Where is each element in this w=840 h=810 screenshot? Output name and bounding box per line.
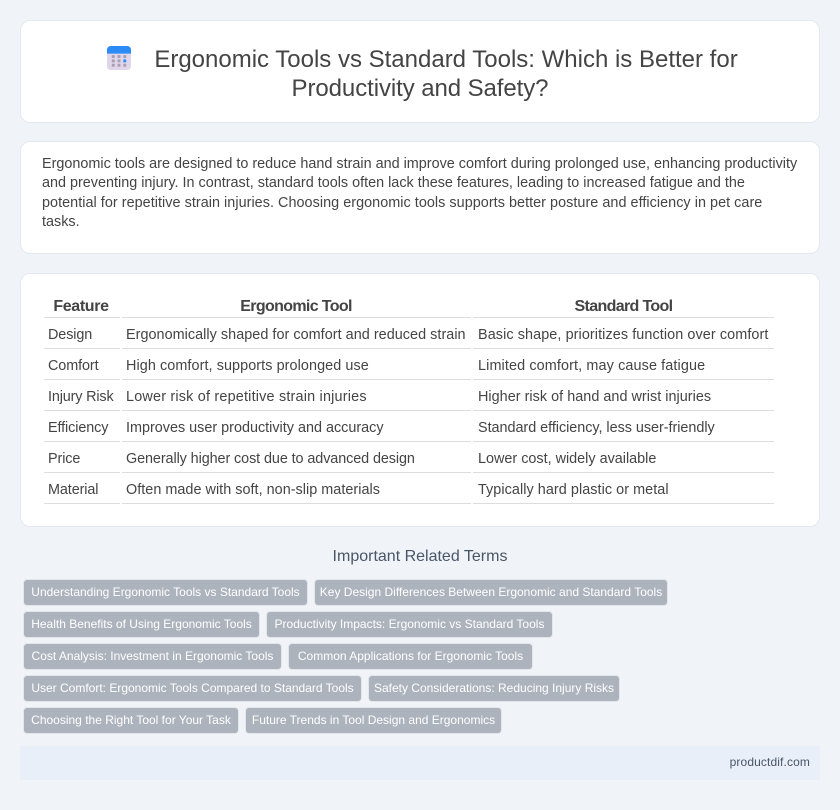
table row: design: Design — [48, 327, 92, 343]
tag — [246, 708, 501, 733]
table row: material — [44, 482, 774, 504]
tag: Productivity Impacts: Ergonomic vs Standard Tools — [275, 617, 544, 631]
tag: Choosing the Right Tool for Your Task — [31, 713, 231, 727]
table row: price — [44, 451, 774, 473]
tag — [289, 644, 532, 669]
tag — [24, 580, 307, 605]
title — [154, 46, 738, 102]
tag: Future Trends in Tool Design and Ergonomics — [252, 713, 495, 727]
icon: calendar — [107, 46, 131, 70]
table row: efficiency: Standard efficiency, less user-friendly — [478, 420, 715, 436]
tag: User Comfort: Ergonomic Tools Compared to Standard Tools — [31, 681, 354, 695]
title: Productivity and Safety? — [292, 75, 548, 102]
intro text: and preventing injury. In contrast, standard tools often lack these features, leading to increased fatigue and the — [42, 175, 745, 191]
table header — [44, 298, 774, 318]
table row: design — [44, 327, 774, 349]
table row: injury risk: Lower risk of repetitive strain injuries — [126, 389, 367, 405]
table row: efficiency: Improves user productivity and accuracy — [126, 420, 384, 436]
intro text: potential for repetitive strain injuries. Choosing ergonomic tools supports better posture and efficiency in pet care — [42, 195, 762, 211]
tag — [315, 580, 667, 605]
table row: comfort: High comfort, supports prolonged use — [126, 358, 369, 374]
table row: price: Price — [48, 451, 80, 467]
tag: Safety Considerations: Reducing Injury Risks — [374, 681, 614, 695]
tag: Health Benefits of Using Ergonomic Tools — [31, 617, 252, 631]
tag: Key Design Differences Between Ergonomic and Standard Tools — [320, 585, 662, 599]
tag — [24, 676, 361, 701]
tag: Cost Analysis: Investment in Ergonomic Tools — [32, 649, 273, 663]
footer source text: productdif.com — [730, 755, 810, 769]
panel: introduction — [20, 141, 820, 254]
table row: material: Material — [48, 482, 98, 498]
tag — [369, 676, 619, 701]
table row: price: Lower cost, widely available — [478, 451, 656, 467]
table row: injury risk: Higher risk of hand and wrist injuries — [478, 389, 711, 405]
intro text: tasks. — [42, 214, 80, 230]
table header: Standard Tool — [575, 298, 672, 315]
table row: design: Ergonomically shaped for comfort and reduced strain — [126, 327, 466, 343]
table row: efficiency — [44, 420, 774, 442]
table row: comfort: Limited comfort, may cause fatigue — [478, 358, 705, 374]
tag: Common Applications for Ergonomic Tools — [298, 649, 523, 663]
tag — [24, 612, 259, 637]
tag — [24, 708, 238, 733]
table row: comfort — [44, 358, 774, 380]
table row: material: Often made with soft, non-slip materials — [126, 482, 380, 498]
intro text: Ergonomic tools are designed to reduce hand strain and improve comfort during prolonged use, enhancing productivity — [42, 156, 797, 172]
tag — [24, 644, 281, 669]
table row: injury risk: Injury Risk — [48, 389, 114, 405]
tag: Understanding Ergonomic Tools vs Standard Tools — [31, 585, 300, 599]
table header: Feature — [53, 298, 109, 315]
intro text — [42, 156, 798, 230]
tag list: related terms — [23, 579, 668, 734]
panel: comparison table — [20, 273, 820, 527]
table header: Ergonomic Tool — [240, 298, 352, 315]
heading: important related terms: Important Related Terms — [333, 548, 507, 565]
table row: price: Generally higher cost due to advanced design — [126, 451, 415, 467]
table row: material: Typically hard plastic or metal — [478, 482, 669, 498]
table row: comfort: Comfort — [48, 358, 98, 374]
table row: efficiency: Efficiency — [48, 420, 108, 436]
panel: title header — [20, 20, 820, 123]
tag — [267, 612, 552, 637]
title: Ergonomic Tools vs Standard Tools: Which is Better for — [154, 46, 738, 73]
table row: design: Basic shape, prioritizes function over comfort — [478, 327, 768, 343]
table row: injury risk — [44, 389, 774, 411]
footer bar — [20, 746, 820, 780]
